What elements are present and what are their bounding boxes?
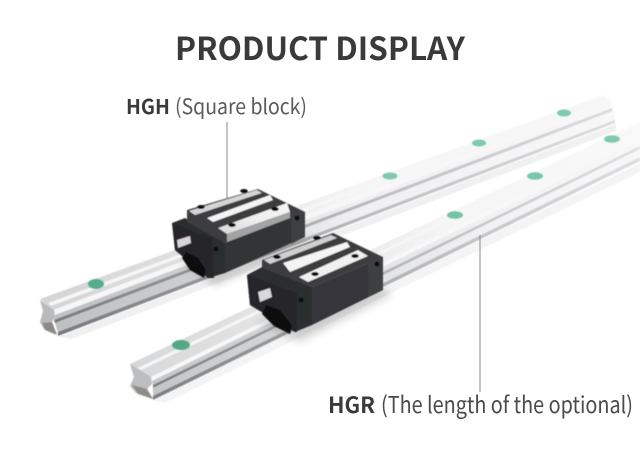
rail: rear linear guide [40, 95, 616, 339]
label: HGH square block: (Square block) [175, 91, 307, 121]
holes [197, 205, 205, 209]
cap [447, 211, 463, 219]
block side [312, 257, 383, 325]
block: front carriage [247, 233, 383, 334]
steel plates [207, 195, 273, 222]
block top [262, 233, 383, 287]
steel plates [283, 242, 350, 272]
leader line: HGH [226, 122, 228, 198]
label: HGH square block: HGH [126, 90, 170, 120]
rail slot [182, 252, 206, 278]
holes [273, 255, 281, 259]
cap [382, 172, 398, 180]
title: PRODUCT DISPLAY [175, 24, 465, 70]
cap [557, 110, 571, 116]
rail end profile [40, 300, 57, 335]
label: HGR rail length: HGR [328, 388, 375, 420]
block: HGH rear carriage [172, 189, 305, 278]
cap [172, 340, 190, 350]
block shadows [180, 238, 392, 342]
cap [604, 135, 620, 143]
green caps on rails [88, 110, 620, 350]
block end face [247, 267, 312, 332]
block top [187, 189, 305, 243]
rail end profile [130, 364, 153, 399]
cap [472, 140, 486, 146]
cap [88, 279, 104, 289]
rail: front linear guide [130, 122, 640, 403]
label: HGH square block [126, 90, 307, 121]
rail slot [262, 305, 292, 334]
back band [264, 235, 337, 264]
grease nipple [258, 288, 272, 302]
back band [189, 190, 262, 215]
leader line: HGR [479, 235, 481, 392]
rail top face [130, 122, 640, 378]
grease nipple [177, 236, 191, 248]
cap [527, 172, 543, 180]
rail top face [40, 95, 612, 312]
block end face [172, 218, 225, 278]
block side [225, 212, 305, 273]
